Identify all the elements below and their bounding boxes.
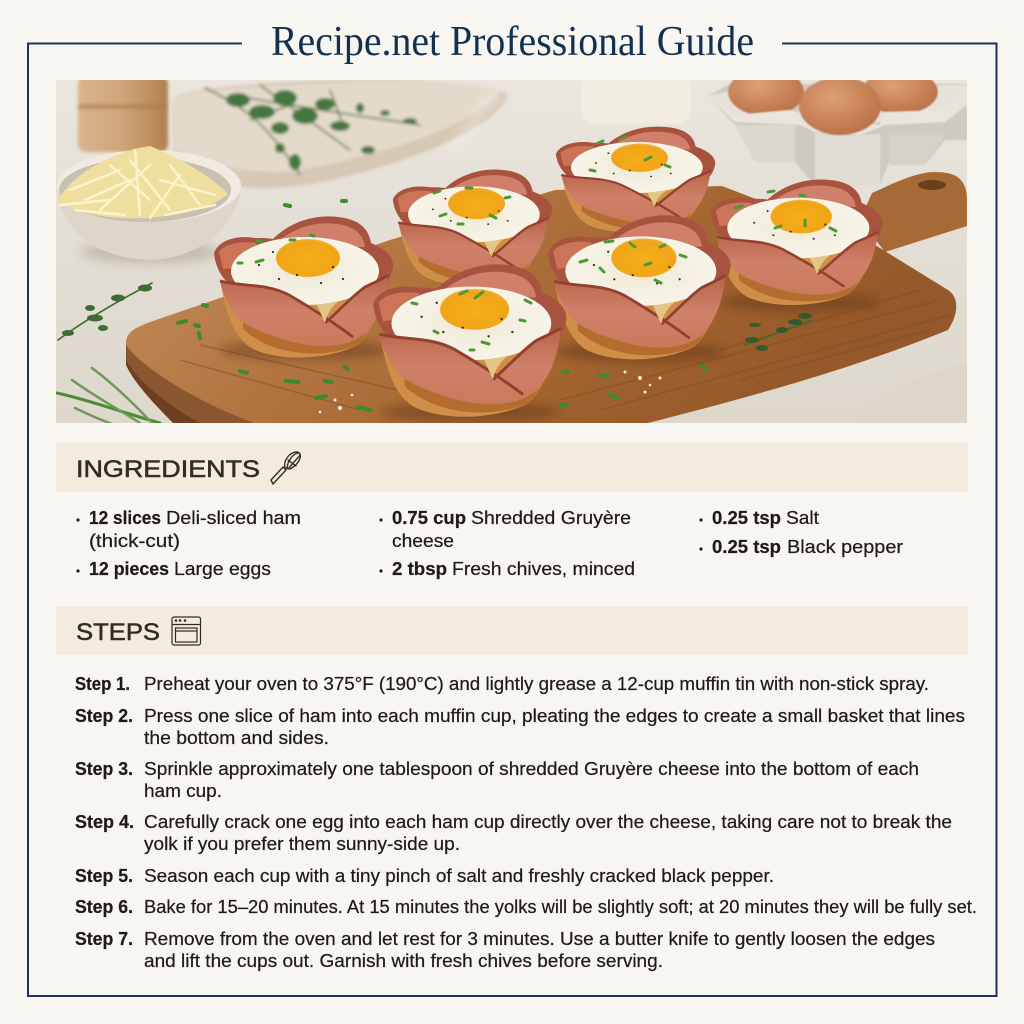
section header: steps — [56, 606, 968, 655]
round serving plate with thyme — [172, 80, 507, 188]
pepper mill — [78, 76, 168, 152]
table surface — [56, 80, 967, 423]
ingredients column 2: Shredded Gruyère — [471, 508, 631, 528]
step 3: ham cup. — [144, 781, 222, 801]
ingredients column 3: Salt — [786, 508, 819, 528]
bowl of shredded cheese — [57, 146, 241, 264]
cloth napkin — [850, 362, 967, 423]
step 3: Step 3. — [75, 758, 133, 779]
hero photo: ham and egg cups on a wooden board — [56, 68, 967, 430]
ingredients column 3: 0.25 tsp — [712, 536, 781, 557]
step 5: Step 5. — [75, 865, 133, 886]
step 2: the bottom and sides. — [144, 728, 329, 748]
steam — [455, 94, 502, 138]
ingredients column 3: 0.25 tsp — [712, 507, 781, 528]
cup: back centre — [393, 170, 552, 285]
step 4: yolk if you prefer them sunny-side up. — [144, 834, 460, 854]
step 1: Preheat your oven to 375°F (190°C) and lightly grease a 12-cup muffin tin with non-stick spray. — [144, 674, 929, 694]
icon: whisk — [271, 452, 300, 484]
milk glass — [583, 80, 689, 123]
cup: front left — [214, 216, 393, 358]
step 2 — [75, 705, 965, 748]
ingredients column 1: 12 pieces — [89, 558, 169, 579]
ingredients column 2 — [379, 507, 635, 579]
ingredients column 1: (thick-cut) — [89, 531, 180, 551]
ingredients column 1 — [76, 507, 301, 579]
salt and pepper flecks — [319, 370, 662, 413]
ingredients column 2: 0.75 cup — [392, 507, 466, 528]
step 4: Carefully crack one egg into each ham cup directly over the cheese, taking care not to break the — [144, 812, 952, 832]
step 5: Season each cup with a tiny pinch of salt and freshly cracked black pepper. — [144, 866, 774, 886]
step 4 — [75, 811, 952, 854]
step 2: Step 2. — [75, 705, 133, 726]
fresh chives left — [57, 368, 160, 425]
ingredients column 1: 12 slices — [89, 507, 161, 528]
step 4: Step 4. — [75, 811, 134, 832]
ingredients column 1: Large eggs — [174, 559, 271, 579]
step 6: Bake for 15–20 minutes. At 15 minutes the yolks will be slightly soft; at 20 minutes they will be fully set. — [144, 897, 977, 917]
ingredients list — [76, 507, 903, 579]
heading: ingredients: INGREDIENTS — [76, 456, 260, 483]
ingredients column 3: Black pepper — [787, 537, 903, 557]
cup: front right — [548, 215, 731, 359]
thyme sprig left — [58, 283, 152, 340]
step 3 — [75, 758, 919, 801]
wooden cutting board — [126, 172, 967, 430]
step 3: Sprinkle approximately one tablespoon of shredded Gruyère cheese into the bottom of each — [144, 759, 919, 779]
steps list — [75, 673, 977, 971]
step 6: Step 6. — [75, 896, 133, 917]
heading: steps: STEPS — [76, 619, 160, 646]
ingredients column 3 — [699, 507, 903, 557]
step 7: and lift the cups out. Garnish with fresh chives before serving. — [144, 951, 663, 971]
title: Recipe.net Professional Guide — [271, 19, 754, 65]
step 7: Remove from the oven and let rest for 3 minutes. Use a butter knife to gently loosen the edges — [144, 929, 935, 949]
egg carton — [710, 80, 967, 184]
cup shadows — [220, 293, 880, 422]
icon: oven — [172, 617, 200, 645]
cup: right — [711, 179, 883, 305]
step 7 — [75, 928, 935, 971]
cup: back right — [556, 127, 715, 232]
ingredients column 2: 2 tbsp — [392, 558, 447, 579]
step 1: Step 1. — [75, 673, 130, 694]
cup: front centre — [373, 264, 566, 417]
step 2: Press one slice of ham into each muffin cup, pleating the edges to create a small basket that lines — [144, 706, 965, 726]
chopped chives on board and table — [178, 201, 707, 410]
section header: ingredients — [56, 443, 968, 492]
ingredients column 2: Fresh chives, minced — [452, 559, 635, 579]
step 7: Step 7. — [75, 928, 133, 949]
ingredients column 2: cheese — [392, 531, 454, 551]
ingredients column 1: Deli-sliced ham — [166, 508, 301, 528]
thyme sprig on board — [745, 313, 812, 351]
